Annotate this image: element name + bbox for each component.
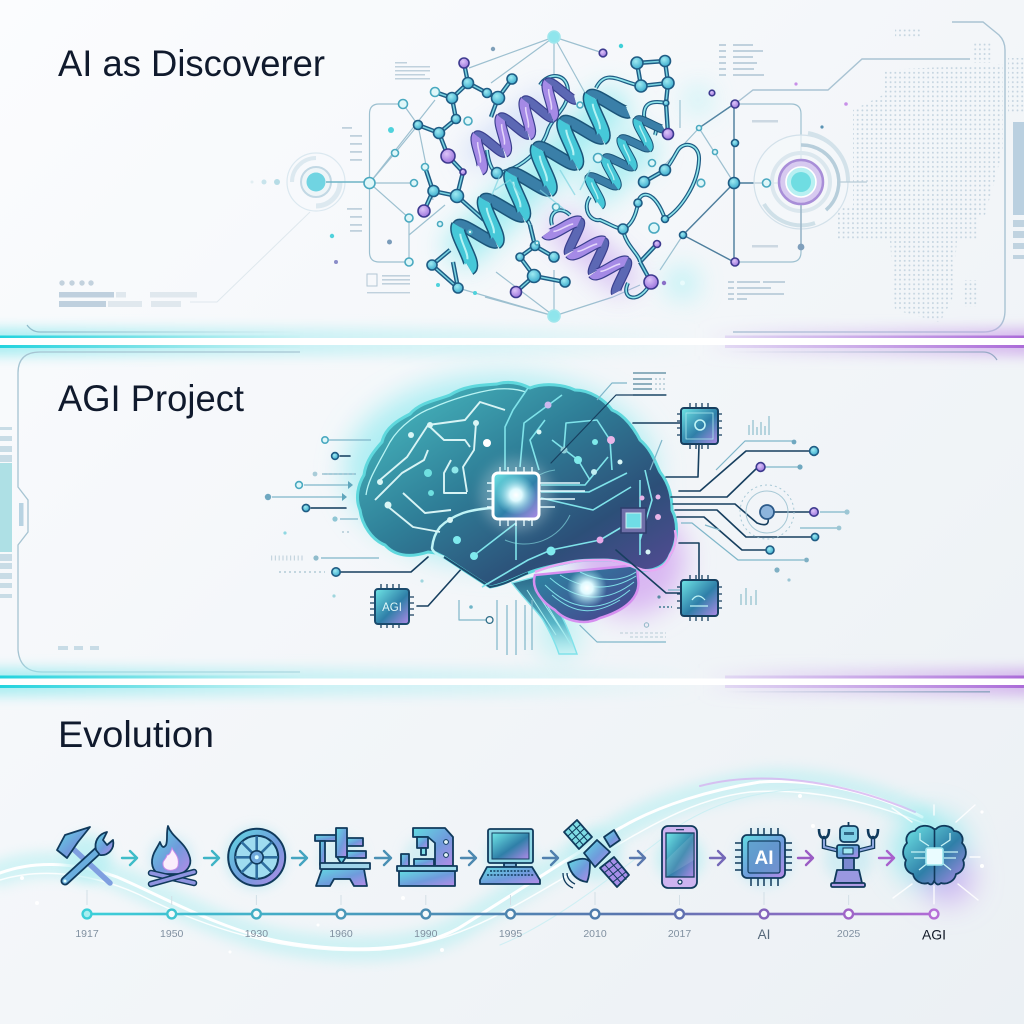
sparkle dots — [20, 794, 984, 954]
divider two — [0, 668, 1024, 696]
timeline labels: AI — [758, 927, 770, 942]
network small data text blocks — [342, 44, 785, 300]
icon: smartphone — [662, 826, 697, 888]
flowing wave band — [0, 778, 940, 951]
timeline labels: 1990 — [414, 928, 438, 940]
title: AI as Discoverer: AI as Discoverer — [58, 43, 325, 84]
icon: hammer and wrench — [57, 827, 113, 883]
helix: long teal — [443, 85, 628, 268]
chip: upper right — [677, 403, 722, 449]
helix: purple upper — [463, 76, 575, 170]
brain icon glow — [894, 814, 974, 904]
helix: purple lower — [546, 210, 635, 293]
right edge data bars — [1008, 58, 1024, 259]
timeline labels — [75, 926, 946, 942]
top data list and wires — [551, 373, 666, 463]
divider one — [0, 325, 1024, 356]
chip: lower right — [677, 575, 722, 621]
brain cortex — [357, 382, 676, 587]
timeline labels: 1995 — [499, 928, 522, 940]
brain stem — [512, 577, 577, 654]
lower connector details — [332, 579, 672, 655]
icon: laptop — [480, 829, 540, 884]
arrows — [122, 851, 894, 865]
world dot map — [838, 28, 1003, 322]
timeline stems — [87, 890, 934, 905]
molecule nodes — [330, 31, 848, 322]
left edge data bars — [0, 427, 99, 650]
molecular bonds — [418, 61, 699, 298]
icon: AI chip: AI — [754, 848, 774, 869]
panel: Evolution — [0, 714, 984, 954]
brain glow — [345, 375, 685, 660]
HUD frame with notch — [18, 352, 300, 672]
right output wires — [616, 423, 850, 593]
chip: AGI — [370, 584, 414, 628]
bar minis — [741, 416, 769, 605]
side chip in brain — [621, 508, 646, 533]
left target icon — [250, 153, 369, 211]
protein glow — [454, 88, 710, 297]
timeline nodes — [83, 910, 938, 918]
panel: AI as Discoverer — [58, 22, 1024, 332]
brain light traces — [375, 388, 652, 587]
panel: AGI Project — [0, 352, 997, 672]
icon: AI chip — [735, 828, 792, 886]
chip: AGI: AGI — [382, 602, 402, 614]
right target icon — [754, 133, 867, 250]
icon glows — [63, 828, 872, 888]
icon: milling machine — [397, 828, 457, 886]
timeline labels: 2025 — [837, 928, 860, 940]
icon: AGI brain — [903, 826, 966, 884]
left input wires — [265, 437, 472, 606]
title: Evolution: Evolution — [58, 714, 214, 755]
HUD frame top right — [725, 352, 997, 360]
network right stronger links — [683, 104, 766, 262]
icon: machine tool — [315, 828, 370, 886]
HUD circuit lines upper right — [735, 59, 970, 104]
timeline labels: 1960 — [329, 928, 353, 940]
central chip — [480, 459, 585, 531]
lower left data bars — [59, 212, 310, 307]
brain icon rays — [892, 805, 980, 904]
timeline labels: 2010 — [583, 928, 607, 940]
icon: wheel — [228, 829, 285, 886]
timeline labels: 1950 — [160, 928, 184, 940]
timeline line — [87, 913, 934, 915]
network left frame — [370, 37, 801, 316]
title: AGI Project: AGI Project — [58, 378, 245, 419]
icon: satellite — [563, 820, 629, 888]
brain trace nodes — [377, 402, 661, 560]
timeline labels: AGI — [922, 926, 946, 942]
timeline labels: 1930 — [245, 928, 268, 940]
HUD frame top panel — [733, 22, 1005, 332]
timeline labels: 1917 — [75, 928, 99, 940]
brain cerebellum — [534, 565, 638, 622]
icon: fire — [151, 826, 194, 884]
timeline labels: 2017 — [668, 928, 691, 940]
icon: robot — [819, 822, 878, 887]
helix: short teal — [580, 112, 664, 205]
